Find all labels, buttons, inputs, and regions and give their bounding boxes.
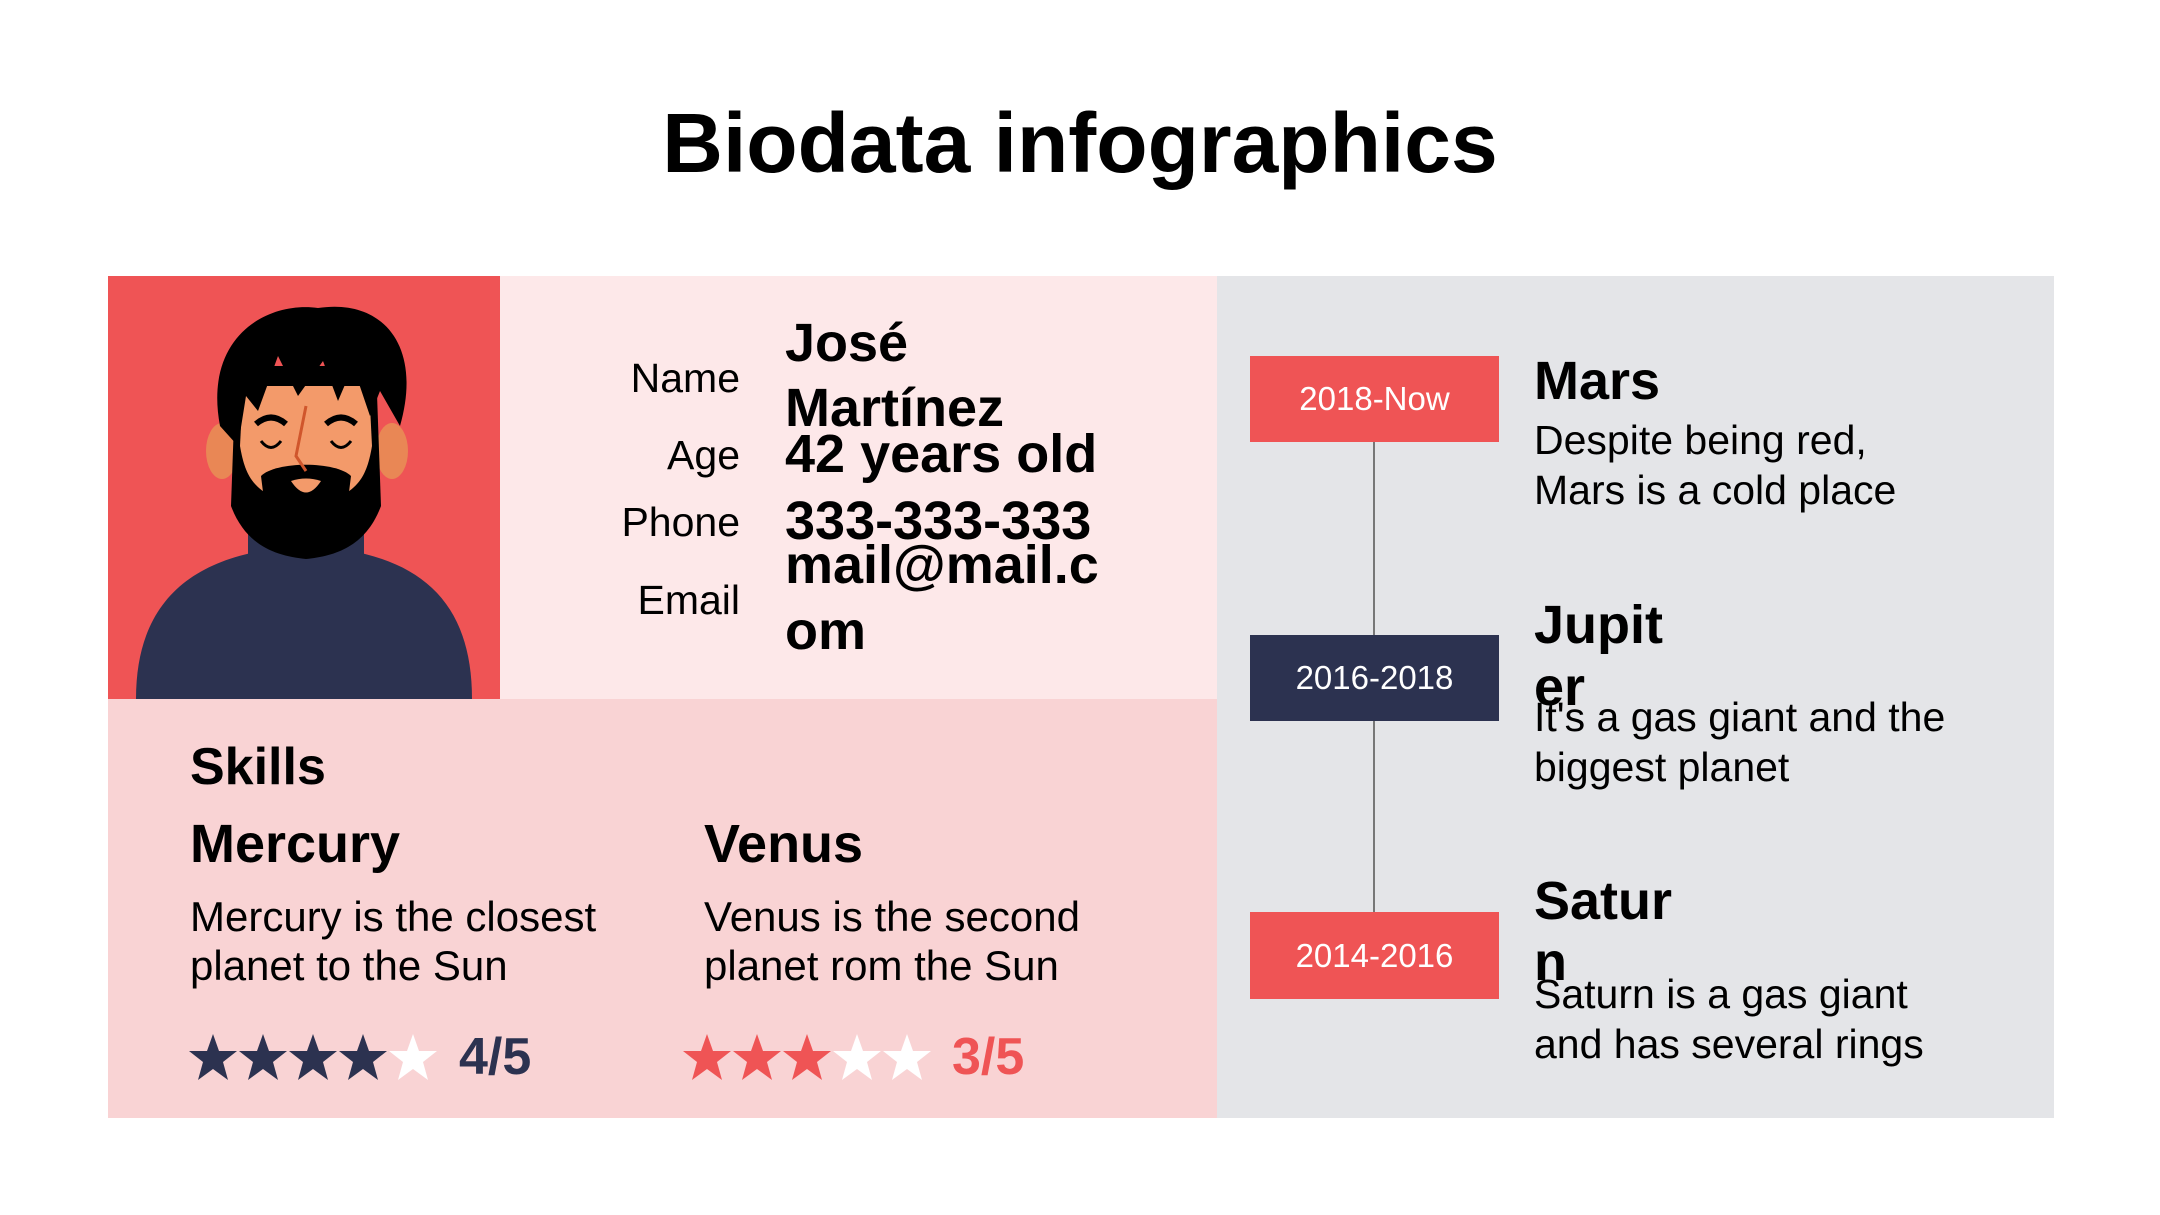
text: values	[785, 313, 1099, 661]
timeline item: 2018-Now: 2018-Now	[1299, 380, 1450, 417]
timeline item: 2014-2016: 2014-2016	[1296, 937, 1453, 974]
text: labels	[621, 355, 740, 623]
skill: venus: Venus is the second	[704, 893, 1080, 940]
timeline item: 2014-2016: and has several rings	[1534, 1021, 1924, 1067]
panel: skills	[108, 699, 1217, 1118]
timeline item: 2016-2018: Jupit	[1534, 595, 1663, 655]
timeline item: 2016-2018: biggest planet	[1534, 744, 1789, 790]
timeline item: 2018-Now: Despite being red,	[1534, 417, 1867, 463]
timeline item: 2018-Now: Mars is a cold place	[1534, 467, 1896, 513]
text: labels: Name	[631, 355, 740, 401]
text: labels: Phone	[621, 499, 740, 545]
timeline item: 2018-Now: Mars	[1534, 351, 1660, 411]
skill: mercury: Mercury is the closest	[190, 893, 596, 940]
skill: mercury: Mercury	[190, 814, 400, 874]
timeline item: 2016-2018: 2016-2018	[1296, 659, 1453, 696]
timeline item: 2016-2018: It's a gas giant and the	[1534, 694, 1945, 740]
rating stars 4/5	[189, 1034, 437, 1080]
timeline item: 2016-2018: er	[1534, 657, 1585, 717]
skill: venus: Venus	[704, 814, 863, 874]
timeline item: 2014-2016: n	[1534, 932, 1567, 992]
text: values: 333-333-333	[785, 491, 1091, 551]
text: values: Martínez	[785, 378, 1004, 438]
timeline item: 2014-2016	[1250, 871, 1924, 1067]
heading: skills: Skills	[190, 738, 326, 796]
text: values: om	[785, 601, 866, 661]
skill: mercury: planet to the Sun	[190, 942, 508, 989]
timeline item: 2014-2016: Satur	[1534, 871, 1672, 931]
text: values: José	[785, 313, 908, 373]
timeline item: 2016-2018	[1250, 595, 1945, 790]
panel: photo	[108, 276, 500, 699]
panel: personal info	[500, 276, 1217, 699]
text: values: mail@mail.c	[785, 535, 1099, 595]
skill: mercury	[189, 814, 596, 1086]
text: values: 42 years old	[785, 424, 1097, 484]
text: labels: Email	[637, 577, 740, 623]
icon: avatar	[136, 306, 472, 699]
panel: timeline	[1217, 276, 2054, 1118]
skill: mercury: 4/5	[459, 1028, 531, 1086]
title: Biodata infographics	[662, 96, 1498, 190]
timeline item: 2018-Now	[1250, 351, 1896, 513]
skill: venus	[683, 814, 1080, 1086]
text: labels: Age	[667, 432, 740, 478]
skill: venus: 3/5	[952, 1028, 1024, 1086]
skill: venus: planet rom the Sun	[704, 942, 1059, 989]
rating stars 3/5	[683, 1034, 931, 1080]
timeline item: 2014-2016: Saturn is a gas giant	[1534, 971, 1908, 1017]
